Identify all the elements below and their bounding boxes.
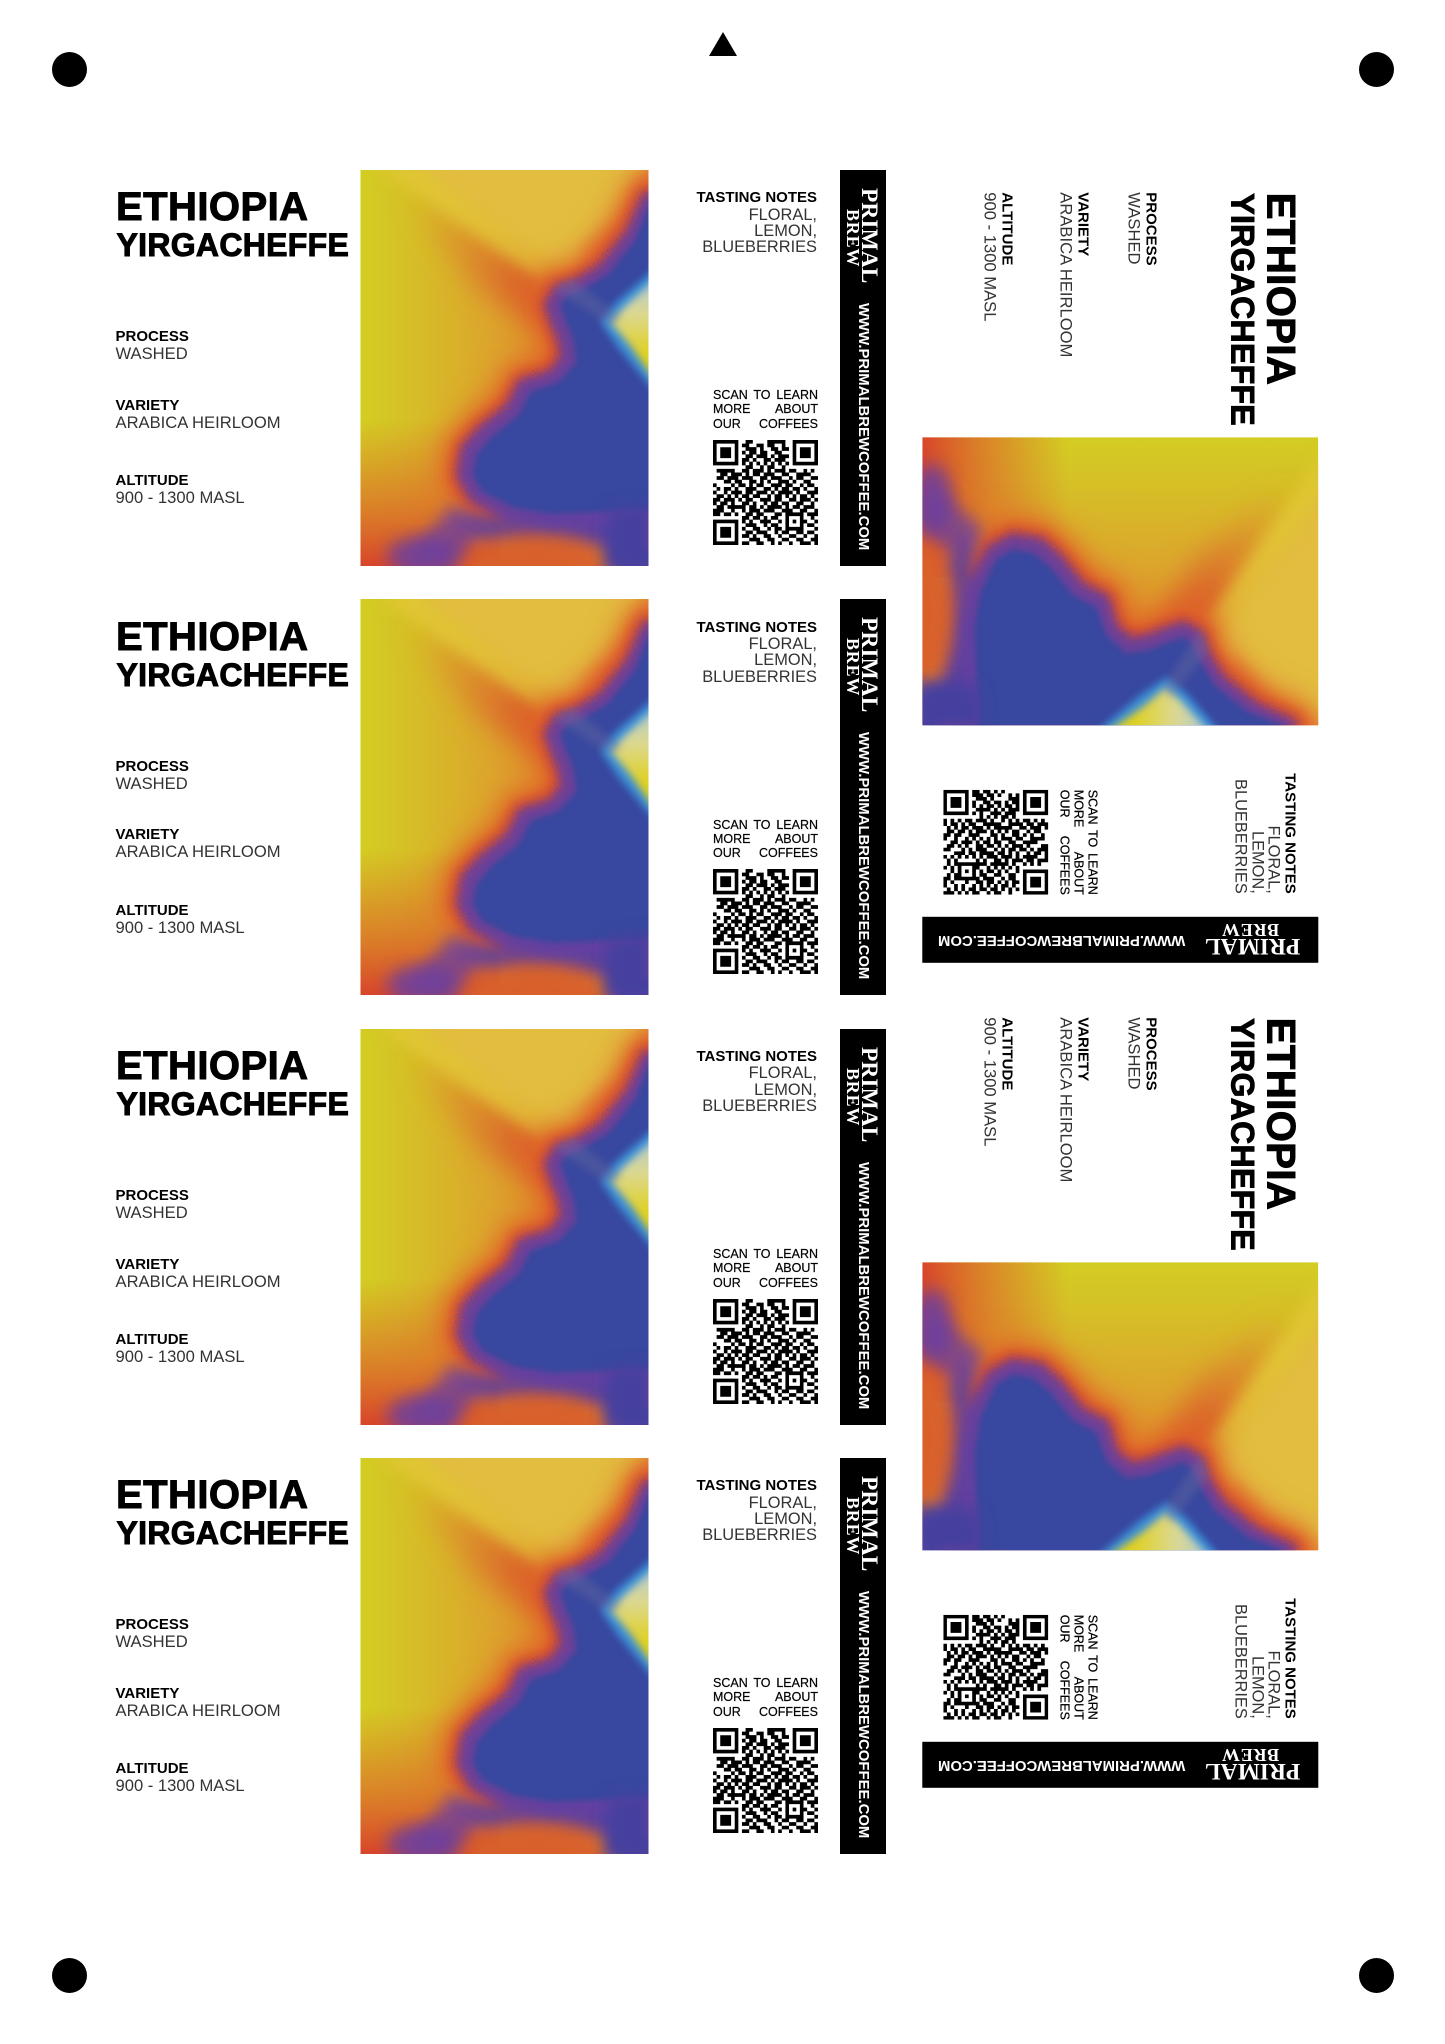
label card: row 1 (116, 170, 886, 566)
spec: altitude: 900 - 1300 MASL (981, 192, 1000, 321)
tasting notes: TASTING NOTES (1282, 1598, 1299, 1719)
scan caption: OUR COFFEES (1057, 1615, 1071, 1720)
tasting notes: LEMON, (754, 1081, 817, 1099)
website: WWW.PRIMALBREWCOFFEE.COM (938, 1757, 1185, 1773)
gradient artwork (360, 1458, 648, 1854)
logo: BREW (1221, 920, 1279, 940)
scan caption: OUR COFFEES (713, 1276, 818, 1290)
scan caption: OUR COFFEES (713, 417, 818, 431)
spec: altitude: ALTITUDE (999, 1017, 1016, 1090)
spec: process: PROCESS (116, 328, 189, 345)
scan caption: SCAN TO LEARN (1086, 790, 1100, 895)
title: YIRGACHEFFE (116, 1515, 349, 1551)
spec: variety: VARIETY (116, 826, 179, 843)
tasting notes: FLORAL, (1264, 1650, 1282, 1719)
spec: altitude: 900 - 1300 MASL (116, 488, 245, 507)
tasting notes: TASTING NOTES (696, 618, 817, 636)
title (1224, 193, 1300, 429)
spec: process: WASHED (116, 1203, 188, 1222)
tasting notes: TASTING NOTES (696, 189, 817, 206)
website: WWW.PRIMALBREWCOFFEE.COM (855, 1591, 871, 1838)
QR code (713, 869, 818, 974)
logo: BREW (843, 1497, 863, 1555)
tasting notes: BLUEBERRIES (702, 1526, 817, 1544)
spec: altitude: ALTITUDE (116, 1331, 189, 1348)
scan caption: OUR COFFEES (1057, 790, 1071, 895)
title: YIRGACHEFFE (116, 1086, 349, 1122)
black brand bar (840, 1458, 886, 1854)
tasting notes: BLUEBERRIES (1232, 779, 1250, 894)
scan caption: SCAN TO LEARN (713, 1247, 818, 1261)
spec: process: PROCESS (116, 1187, 189, 1204)
logo (1204, 1745, 1300, 1783)
spec: process: PROCESS (1143, 192, 1160, 266)
scan caption: MORE ABOUT (713, 832, 818, 846)
QR code (713, 1728, 818, 1833)
title: ETHIOPIA (116, 1473, 309, 1517)
spec: variety: ARABICA HEIRLOOM (1056, 192, 1075, 357)
tasting notes: LEMON, (1248, 831, 1266, 894)
rotated label card: upper right (922, 177, 1318, 977)
logo: PRIMAL (1205, 933, 1300, 959)
black brand bar (840, 599, 886, 995)
logo: BREW (1221, 1745, 1279, 1765)
spec: variety: ARABICA HEIRLOOM (116, 842, 281, 861)
scan caption: MORE ABOUT (1072, 1615, 1086, 1720)
label card: row 4 (116, 1458, 886, 1854)
scan caption: OUR COFFEES (713, 846, 818, 860)
icon: registration triangle (709, 32, 737, 56)
spec: variety: ARABICA HEIRLOOM (116, 1701, 281, 1720)
QR code (943, 790, 1048, 895)
website: WWW.PRIMALBREWCOFFEE.COM (855, 732, 871, 979)
tasting notes: BLUEBERRIES (702, 668, 817, 686)
spec: altitude (116, 472, 245, 507)
logo: PRIMAL (856, 617, 882, 712)
title (116, 185, 349, 263)
logo: BREW (843, 209, 863, 267)
spec: process: WASHED (1125, 1017, 1144, 1090)
tasting notes: LEMON, (754, 651, 817, 669)
QR code (713, 1299, 818, 1404)
spec: process: WASHED (116, 344, 188, 363)
gradient artwork (922, 1262, 1318, 1551)
gradient artwork (360, 599, 648, 995)
spec: variety: ARABICA HEIRLOOM (1056, 1017, 1075, 1182)
spec: process (116, 328, 189, 363)
spec: altitude (116, 1331, 245, 1366)
tasting notes: BLUEBERRIES (702, 238, 817, 256)
title: YIRGACHEFFE (1225, 1018, 1261, 1251)
title: ETHIOPIA (1259, 1018, 1303, 1210)
label card: row 2 (116, 599, 886, 995)
scan caption: SCAN TO LEARN (713, 818, 818, 832)
QR code (943, 1615, 1048, 1720)
tasting notes (696, 618, 817, 686)
tasting notes (696, 189, 817, 256)
website: WWW.PRIMALBREWCOFFEE.COM (938, 932, 1185, 948)
spec: altitude: ALTITUDE (116, 472, 189, 489)
spec: variety (116, 1256, 281, 1290)
spec: process: WASHED (116, 774, 188, 792)
gradient artwork (360, 1029, 648, 1425)
scan caption: SCAN TO LEARN (1086, 1615, 1100, 1720)
scan caption (713, 1247, 818, 1290)
tasting notes: TASTING NOTES (1282, 773, 1299, 894)
spec: variety: ARABICA HEIRLOOM (116, 413, 281, 432)
registration dot: bottom right (1359, 1958, 1394, 1992)
spec: altitude (116, 902, 245, 936)
spec: process: PROCESS (116, 758, 189, 774)
title: ETHIOPIA (116, 1044, 309, 1088)
spec: altitude: ALTITUDE (999, 192, 1016, 265)
logo: PRIMAL (1205, 1758, 1300, 1784)
registration dot: top right (1359, 52, 1394, 87)
spec: process (116, 758, 189, 792)
spec: altitude: ALTITUDE (116, 1760, 189, 1777)
tasting notes (1231, 737, 1298, 894)
black brand bar (840, 1028, 886, 1424)
spec: process (1126, 192, 1160, 382)
tasting notes: FLORAL, (749, 206, 817, 224)
scan caption (713, 818, 818, 860)
spec: altitude (982, 192, 1016, 382)
logo: PRIMAL (856, 188, 882, 283)
logo: BREW (843, 638, 863, 696)
scan caption: MORE ABOUT (713, 402, 818, 416)
logo (1204, 920, 1300, 958)
spec: variety (1057, 192, 1091, 382)
spec: variety: ARABICA HEIRLOOM (116, 1272, 281, 1290)
QR code (713, 440, 818, 545)
tasting notes: LEMON, (754, 1510, 817, 1528)
spec: altitude: 900 - 1300 MASL (116, 918, 245, 936)
spec: variety (116, 1685, 281, 1720)
gradient artwork (360, 170, 648, 566)
scan caption (713, 1676, 818, 1719)
tasting notes: FLORAL, (749, 1064, 817, 1082)
spec: altitude: 900 - 1300 MASL (116, 1776, 245, 1795)
logo (843, 617, 882, 712)
title (116, 1044, 349, 1122)
scan caption: OUR COFFEES (713, 1705, 818, 1719)
spec: variety: VARIETY (116, 1685, 179, 1702)
spec: process: WASHED (116, 1632, 188, 1651)
tasting notes: LEMON, (1248, 1656, 1266, 1719)
tasting notes: TASTING NOTES (696, 1048, 817, 1065)
title: ETHIOPIA (1259, 193, 1303, 385)
tasting notes: FLORAL, (749, 1494, 817, 1512)
title: YIRGACHEFFE (116, 656, 349, 692)
title (116, 1473, 349, 1551)
spec: variety (116, 397, 281, 432)
registration dot: bottom left (52, 1958, 87, 1992)
title: YIRGACHEFFE (1225, 193, 1261, 426)
tasting notes: LEMON, (754, 222, 817, 240)
scan caption (713, 388, 818, 431)
scan caption (1057, 1615, 1100, 1720)
tasting notes: BLUEBERRIES (1232, 1604, 1250, 1719)
title: ETHIOPIA (116, 185, 309, 229)
gradient artwork (922, 437, 1318, 726)
title (116, 614, 349, 692)
logo (843, 188, 882, 283)
logo (843, 1476, 881, 1572)
spec: altitude: 900 - 1300 MASL (116, 1347, 245, 1366)
spec: process (1126, 1017, 1160, 1207)
spec: variety: VARIETY (1074, 1017, 1091, 1081)
spec: process: PROCESS (116, 1616, 189, 1633)
scan caption: SCAN TO LEARN (713, 388, 818, 402)
spec: process (116, 1187, 189, 1222)
registration dot: top left (52, 52, 87, 87)
scan caption: MORE ABOUT (713, 1690, 818, 1704)
spec: variety (1057, 1017, 1091, 1207)
scan caption: SCAN TO LEARN (713, 1676, 818, 1690)
logo: BREW (843, 1068, 863, 1126)
spec: variety: VARIETY (116, 397, 179, 414)
black brand bar (922, 917, 1318, 963)
tasting notes: TASTING NOTES (696, 1477, 817, 1494)
spec: altitude: 900 - 1300 MASL (981, 1017, 1000, 1146)
scan caption: MORE ABOUT (1072, 790, 1086, 895)
tasting notes (696, 1048, 817, 1115)
spec: process (116, 1616, 189, 1651)
tasting notes: FLORAL, (1264, 825, 1282, 894)
spec: altitude (982, 1017, 1016, 1207)
rotated label card: lower right (922, 1002, 1318, 1802)
tasting notes (1231, 1562, 1298, 1719)
label card: row 3 (116, 1029, 886, 1425)
black brand bar (840, 170, 886, 566)
spec: altitude: ALTITUDE (116, 902, 189, 918)
spec: altitude (116, 1760, 245, 1795)
logo: PRIMAL (856, 1046, 882, 1142)
spec: variety (116, 826, 281, 861)
title (1224, 1018, 1300, 1254)
tasting notes: BLUEBERRIES (702, 1097, 817, 1115)
spec: variety: VARIETY (1074, 192, 1091, 256)
spec: variety: VARIETY (116, 1256, 179, 1272)
spec: process: WASHED (1125, 192, 1144, 265)
title: ETHIOPIA (116, 614, 309, 658)
tasting notes (696, 1477, 817, 1544)
spec: process: PROCESS (1143, 1017, 1160, 1091)
scan caption (1057, 790, 1100, 895)
title: YIRGACHEFFE (116, 227, 349, 263)
tasting notes: FLORAL, (749, 635, 817, 653)
website: WWW.PRIMALBREWCOFFEE.COM (855, 1162, 871, 1409)
scan caption: MORE ABOUT (713, 1261, 818, 1275)
logo: PRIMAL (856, 1476, 882, 1571)
black brand bar (922, 1742, 1318, 1788)
website: WWW.PRIMALBREWCOFFEE.COM (855, 303, 871, 550)
logo (843, 1046, 882, 1142)
